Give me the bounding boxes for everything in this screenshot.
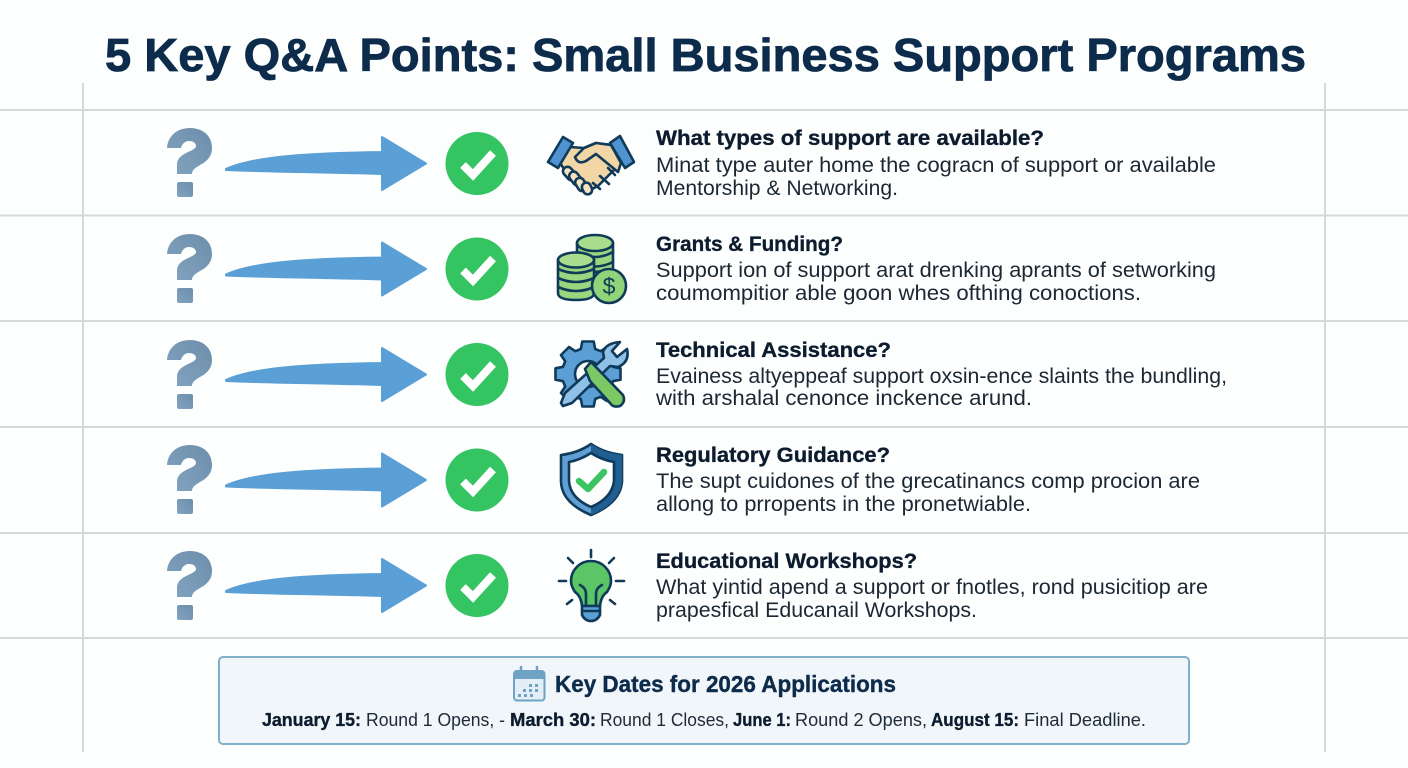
arrow [226,348,426,401]
heading: Grants & Funding? [656,232,843,256]
body text [656,576,1208,622]
body text: Mentorship & Networking. [656,177,898,200]
arrow [226,454,426,506]
key dates list: Final Deadline. [1024,709,1146,730]
heading: What types of support are available? [656,126,1044,150]
key dates list: March 30: [510,709,596,730]
icon: green check [446,238,508,300]
row 1: types of support [167,126,1216,200]
heading: Technical Assistance? [656,338,891,362]
icon: green check [446,343,508,406]
row 4: regulatory guidance [167,443,1200,516]
body text [656,154,1216,200]
body text: The supt cuidones of the grecatinancs comp procion are [656,470,1200,493]
icon: question mark [167,551,212,620]
body text: What yintid apend a support or fnotles, rond pusicitiop are [656,576,1208,599]
key dates list: January 15: [262,709,361,730]
key dates list: Round 2 Opens, [795,709,927,730]
body text [656,259,1216,305]
icon: green check [446,554,508,617]
icon: calendar [514,667,544,700]
row 5: educational workshops [167,549,1208,622]
icon: light bulb [559,550,624,621]
icon: coins: $ [603,273,616,299]
row 2: grants and funding [167,232,1216,305]
icon: question mark [167,340,212,409]
key dates list: June 1: [733,709,791,730]
heading: Regulatory Guidance? [656,443,890,467]
key dates list: Round 1 Closes, [600,709,729,730]
body text: Evainess altyeppeaf support oxsin-ence slaints the bundling, [656,365,1227,388]
icon: question mark [167,445,212,514]
body text: Minat type auter home the cogracn of support or available [656,154,1216,177]
icon: gear and tools [556,342,628,407]
key dates list [262,709,1146,730]
icon: shield [561,444,622,515]
panel heading: Key Dates for 2026 Applications [555,671,896,697]
icon: question mark [167,234,212,303]
key dates list: Round 1 Opens, - [366,709,505,730]
body text: with arshalal cenonce inckence arund. [655,387,1032,410]
row 3: technical assistance [167,338,1227,410]
icon: coins [558,235,626,303]
body text: coumompitior able goon whes ofthing conoctions. [656,282,1141,305]
body text: prapesfical Educanail Workshops. [656,599,977,622]
body text [655,365,1227,410]
arrow [226,559,426,612]
key dates list: August 15: [931,709,1019,730]
arrow [226,137,426,190]
icon: green check [446,448,508,512]
body text: allong to prropents in the pronetwiable. [656,493,1031,516]
arrow [226,242,426,296]
icon: question mark [167,128,212,197]
icon: handshake [548,136,634,196]
title: 5 Key Q&A Points: Small Business Support Programs [105,29,1306,81]
panel: key dates [219,657,1189,744]
icon: green check [446,132,508,195]
body text: Support ion of support arat drenking aprants of setworking [656,259,1216,282]
heading: Educational Workshops? [656,549,917,573]
body text [656,470,1200,516]
